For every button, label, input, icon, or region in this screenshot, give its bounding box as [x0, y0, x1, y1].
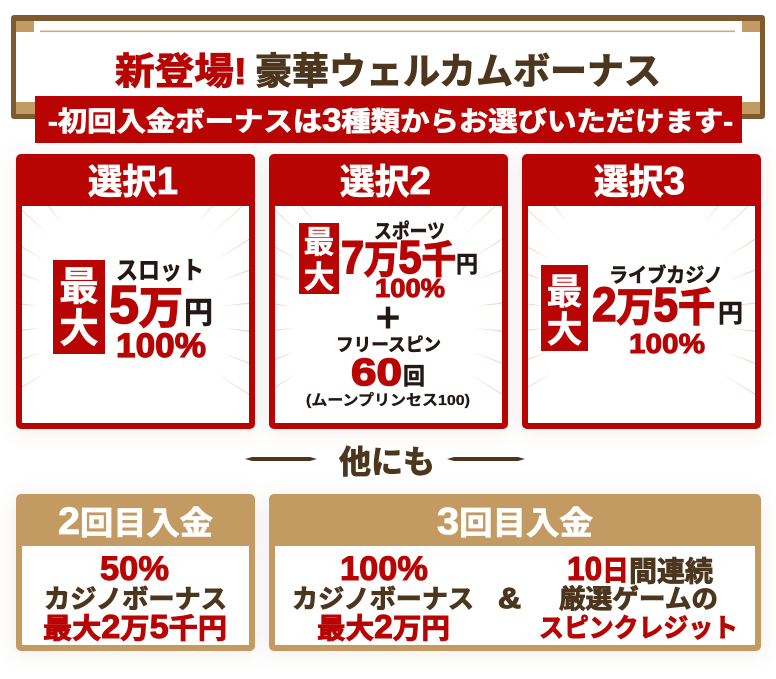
- percentage: 100%: [116, 327, 206, 365]
- heading: third deposit: 3回目入金: [437, 501, 593, 543]
- panel: choice 2: [269, 154, 508, 429]
- spin credit details: [539, 550, 738, 643]
- amount: 50,000 yen: 5万: [109, 275, 183, 335]
- heading: choice 3: 選択3: [594, 160, 685, 203]
- badge: maximum: 大: [546, 309, 583, 350]
- spin credit details: 厳選ゲームの: [559, 584, 718, 614]
- badge: maximum: [541, 265, 588, 351]
- amount: 50,000 yen: 円: [184, 297, 213, 330]
- bonus details: 最大2万5千円: [43, 608, 227, 645]
- heading: second deposit: 2回目入金: [58, 501, 213, 543]
- casino bonus details: カジノボーナス: [292, 584, 474, 614]
- percentage: 100%: [629, 328, 705, 359]
- spins count: [351, 352, 425, 394]
- title frame: [11, 15, 765, 119]
- category: live casino: ライブカジノ: [609, 263, 723, 287]
- category: slot: スロット: [116, 257, 204, 285]
- spin credit details: 間連続: [629, 556, 713, 587]
- bonus details: 50%: [100, 550, 169, 588]
- amount: 25,000 yen: 円: [718, 300, 743, 328]
- percentage: 100%: [375, 273, 445, 303]
- title: 豪華ウェルカムボーナス: [255, 51, 661, 92]
- spin credit details: スピンクレジット: [539, 613, 738, 643]
- casino bonus details: 最大2万円: [317, 608, 450, 645]
- badge: maximum: 大: [59, 307, 99, 351]
- section divider: others: 他にも: [339, 444, 435, 480]
- badge: maximum: 最: [304, 225, 334, 260]
- casino bonus details: [292, 550, 474, 645]
- panel: third deposit: [269, 494, 761, 651]
- amount: 75,000 yen: 7万5千: [341, 231, 456, 283]
- badge: maximum: [299, 223, 339, 295]
- subtitle banner: -初回入金ボーナスは 3種類からお選びいただけます-: [48, 102, 733, 138]
- plus sign: ＋: [374, 303, 402, 334]
- spin credit details: 10日: [567, 550, 629, 587]
- amount: 25,000 yen: 2万5千: [592, 279, 715, 332]
- panel: choice 3: [522, 154, 761, 429]
- category: sports: スポーツ: [374, 220, 445, 243]
- panel: second deposit: [16, 494, 255, 651]
- casino bonus details: 100%: [340, 550, 428, 588]
- free spins label: フリースピン: [336, 335, 441, 355]
- bonus details: カジノボーナス: [44, 584, 227, 614]
- badge: maximum: 最: [59, 265, 99, 309]
- bonus details: [43, 550, 227, 645]
- amount: 75,000 yen: 円: [456, 251, 478, 277]
- badge: maximum: [53, 260, 105, 354]
- badge: maximum: 最: [546, 271, 583, 312]
- section divider: others: [245, 444, 525, 480]
- heading: choice 2: 選択2: [340, 160, 431, 203]
- ampersand: &: [498, 583, 521, 615]
- title: 新登場!: [115, 51, 247, 92]
- soft background shadow: [16, 156, 761, 653]
- spins count: 回: [403, 363, 425, 389]
- spins count: 60: [351, 352, 402, 394]
- badge: maximum: 大: [304, 260, 334, 295]
- panel: choice 1: [16, 154, 255, 429]
- game name: (ムーンプリンセス100): [306, 392, 470, 409]
- heading: choice 1: 選択1: [88, 160, 178, 203]
